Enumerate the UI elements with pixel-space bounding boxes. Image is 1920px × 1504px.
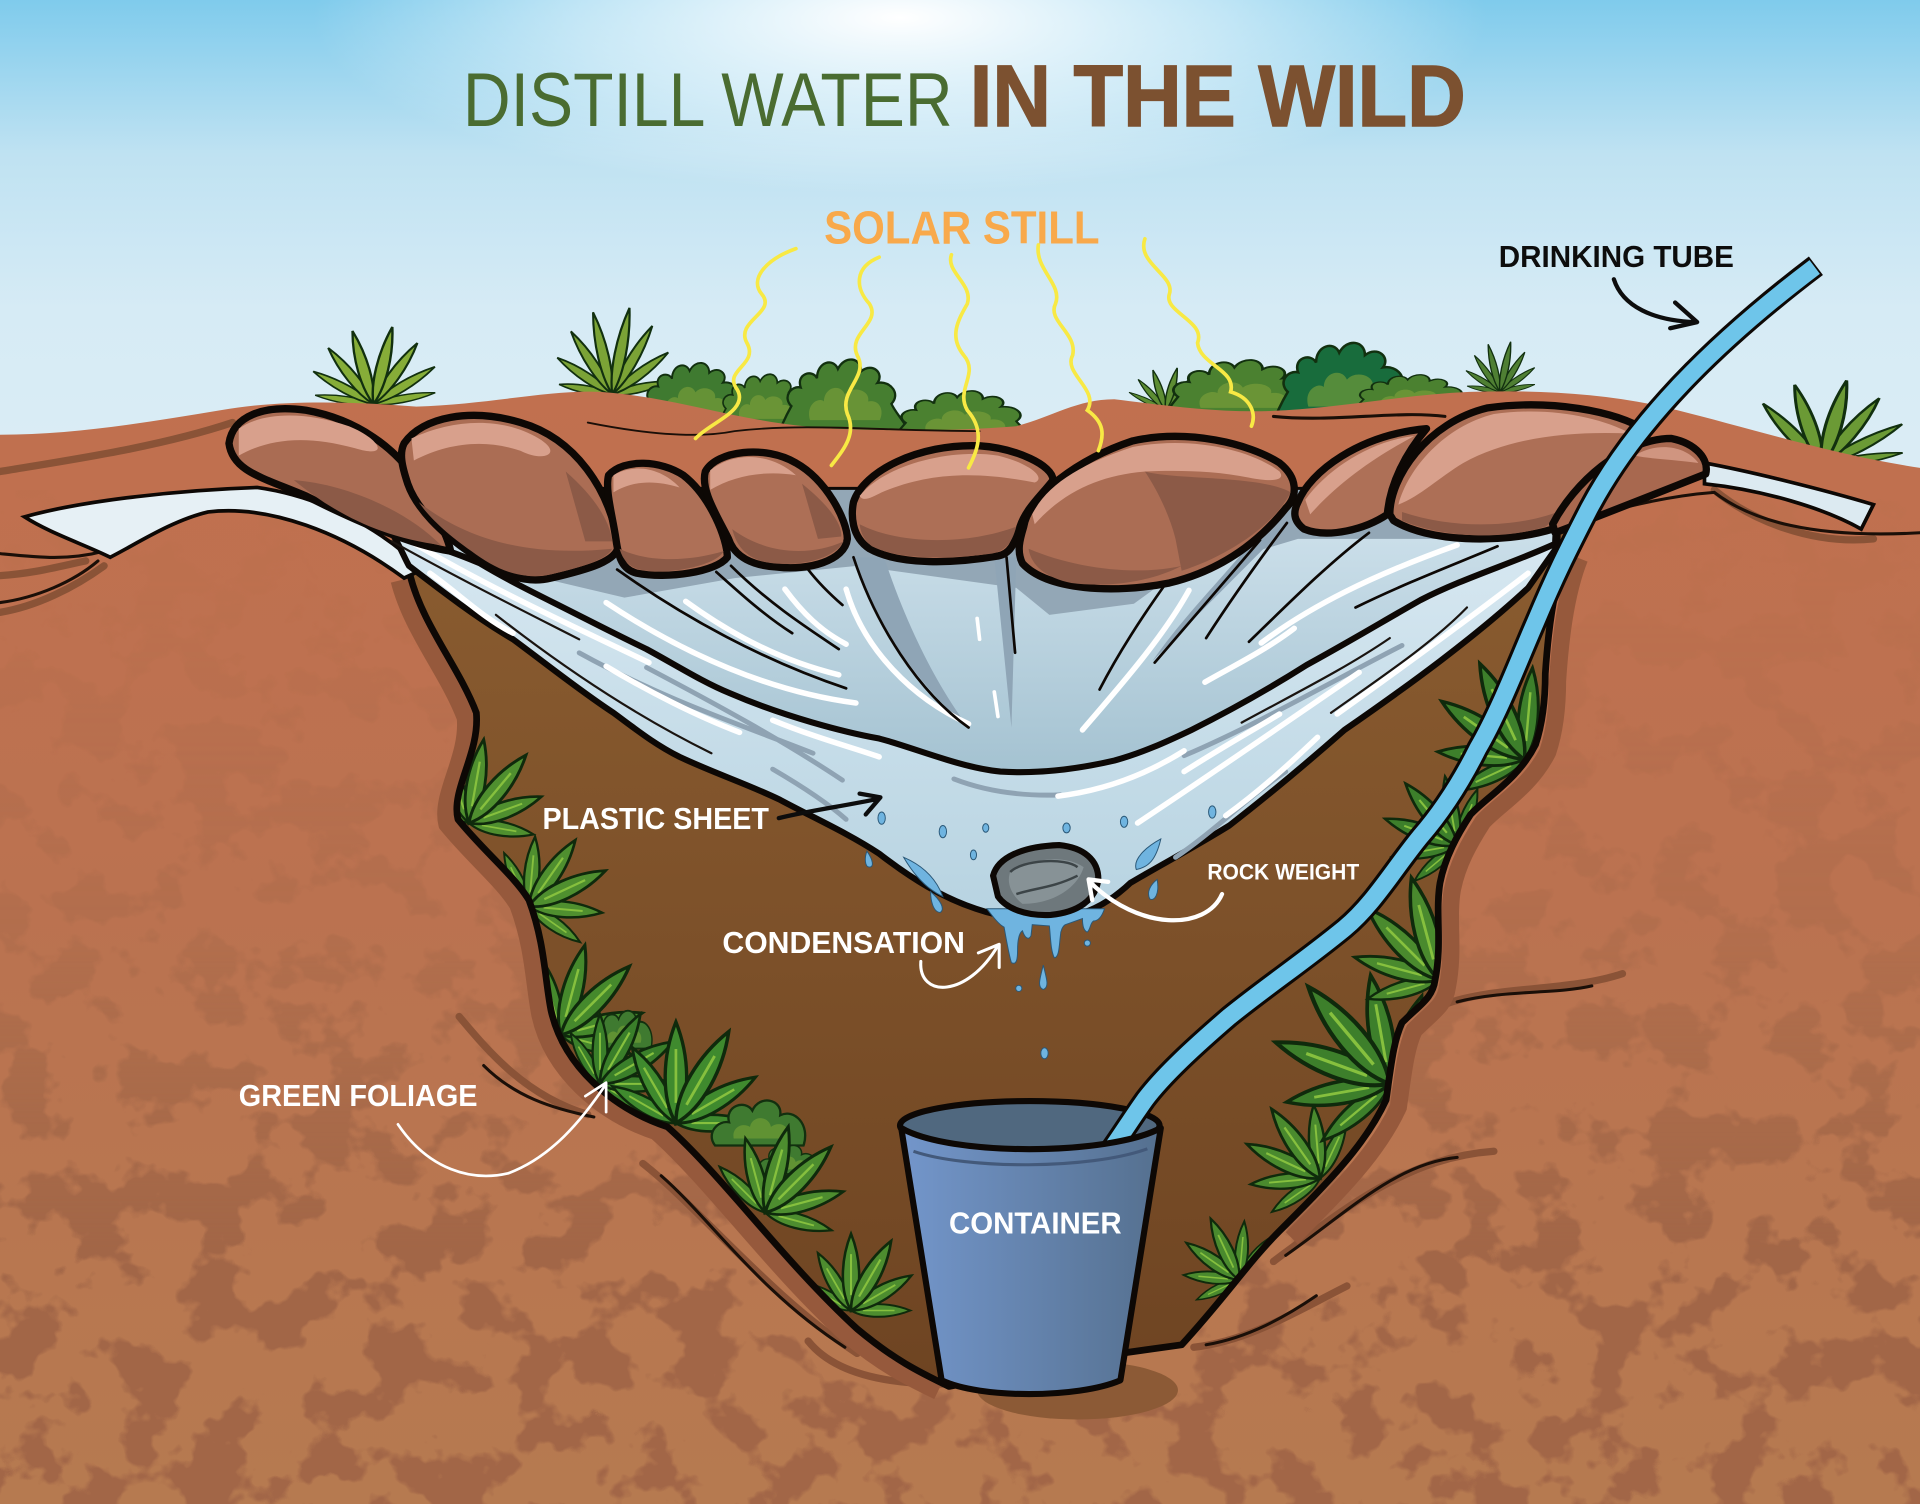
- label: plastic sheet: [542, 794, 880, 836]
- container: CONTAINER: [949, 1206, 1122, 1240]
- rock 1: [229, 409, 451, 551]
- sky background: [0, 0, 1920, 514]
- rock 3: [608, 463, 727, 575]
- rock 7: [1295, 429, 1427, 533]
- ground: [0, 391, 1920, 1504]
- rock 4: [704, 452, 847, 568]
- rock wall: [229, 405, 1706, 589]
- container shadow: [977, 1361, 1178, 1419]
- container: [901, 1128, 1161, 1394]
- rock 9: [1553, 438, 1706, 533]
- label: condensation: CONDENSATION: [722, 926, 965, 960]
- label: drinking tube: DRINKING TUBE: [1499, 240, 1734, 274]
- label: green foliage: [239, 1079, 606, 1176]
- container inner: [900, 1101, 1160, 1150]
- rock 5: [852, 446, 1053, 562]
- drops of condensation: [865, 806, 1216, 1059]
- label: rock weight: [1089, 859, 1360, 920]
- ground cracks: [0, 415, 1920, 1384]
- title: IN THE WILD: [970, 48, 1466, 145]
- green foliage: [411, 629, 1589, 1332]
- soil mottling: [0, 877, 1920, 1504]
- label: green foliage: GREEN FOLIAGE: [239, 1079, 478, 1113]
- rock 6: [1019, 436, 1294, 589]
- drinking tube: [1108, 266, 1816, 1154]
- label: plastic sheet: PLASTIC SHEET: [542, 802, 769, 836]
- sun rays: [696, 239, 1253, 468]
- label: drinking tube: [1499, 240, 1734, 328]
- title: DISTILL WATER: [463, 58, 953, 143]
- plastic sheet: inner pane with folds: [380, 490, 1558, 772]
- rock 8: [1390, 405, 1647, 539]
- pit wall shadows: [399, 558, 1580, 1391]
- heading: solar still: SOLAR STILL: [824, 202, 1100, 254]
- surface vegetation: [311, 307, 1906, 469]
- label: rock weight: ROCK WEIGHT: [1207, 859, 1360, 884]
- rock weight: [993, 845, 1098, 915]
- plastic sheet: outer layer: [389, 514, 1558, 918]
- rock 2: [401, 415, 618, 580]
- plastic sheet: right flap: [1704, 463, 1873, 529]
- pit outline: [410, 551, 1567, 1386]
- pit: [410, 527, 1567, 1386]
- label: condensation: [722, 926, 999, 987]
- title: [463, 48, 1466, 145]
- plastic sheet: left flap: [24, 487, 422, 578]
